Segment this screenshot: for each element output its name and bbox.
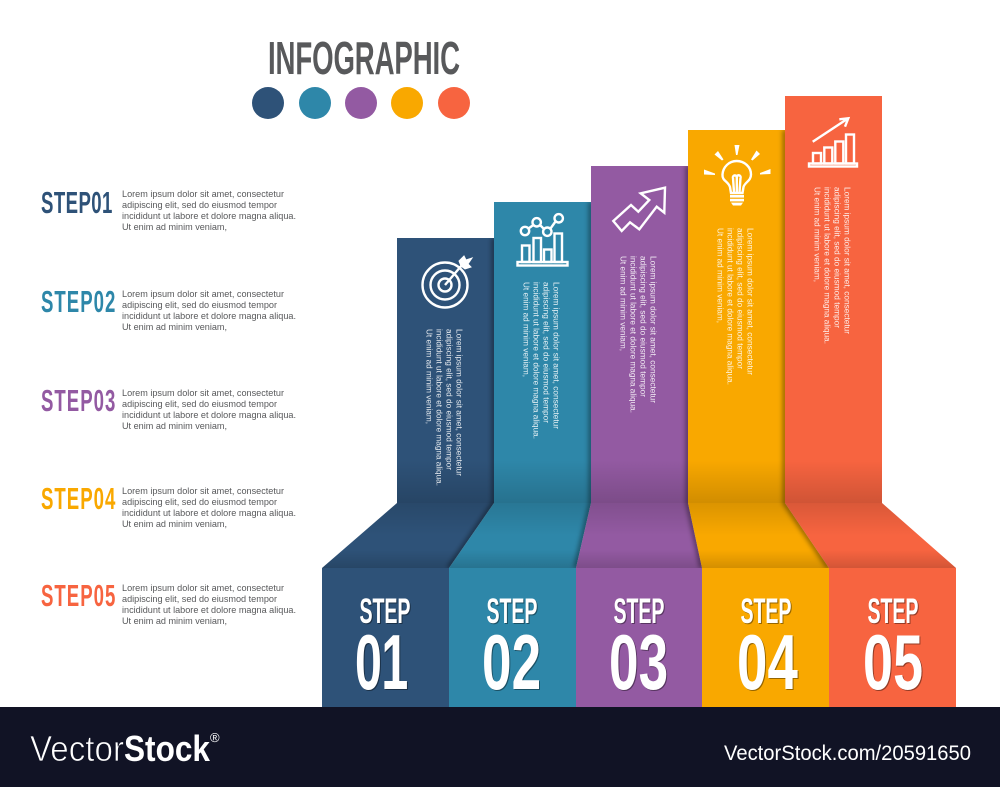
rotated paragraph: column 2: incididunt ut labore et dolore magna aliqua. xyxy=(532,282,542,439)
rotated paragraph: column 2: adipiscing elit, sed do eiusmod tempor xyxy=(542,282,552,423)
rotated paragraph: column 5 xyxy=(812,187,852,344)
rotated paragraph: column 5: Lorem ipsum dolor sit amet, consectetur xyxy=(842,187,852,334)
step label 02: 02 xyxy=(482,620,541,707)
step list item 2: Ut enim ad minim veniam, xyxy=(122,321,227,332)
staircase column: step 5 shape xyxy=(785,96,956,707)
rotated paragraph: column 3: Ut enim ad minim veniam, xyxy=(618,256,628,351)
rotated paragraph: column 4: incididunt ut labore et dolore magna aliqua. xyxy=(726,228,736,385)
step label 02: STEP xyxy=(486,592,537,632)
step label 03: 03 xyxy=(609,620,668,707)
step list item 5: STEP05 xyxy=(41,579,115,613)
rotated paragraph: column 1: Ut enim ad minim veniam, xyxy=(424,329,434,424)
step label 05: STEP xyxy=(868,592,918,632)
step list item 3: incididunt ut labore et dolore magna aliqua. xyxy=(122,409,296,420)
footer bar: Vector xyxy=(30,728,124,769)
rotated paragraph: column 2: Lorem ipsum dolor sit amet, consectetur xyxy=(552,282,562,429)
icon: rising zigzag arrow xyxy=(613,188,665,231)
step list item 4: Lorem ipsum dolor sit amet, consectetur xyxy=(122,485,284,496)
rotated paragraph: column 4 xyxy=(716,228,756,385)
rotated paragraph: column 2 xyxy=(522,282,562,439)
icon: target with arrow xyxy=(422,256,472,308)
step list item 3: Ut enim ad minim veniam, xyxy=(122,420,227,431)
icon: bar chart with arrow xyxy=(809,118,857,166)
rotated paragraph: column 4: Ut enim ad minim veniam, xyxy=(716,228,726,323)
title: INFOGRAPHIC xyxy=(268,34,460,85)
step list item 4: incididunt ut labore et dolore magna aliqua. xyxy=(122,507,296,518)
step list item 2: Lorem ipsum dolor sit amet, consectetur xyxy=(122,288,284,299)
fold shading xyxy=(322,130,956,568)
step list item 4: adipiscing elit, sed do eiusmod tempor xyxy=(122,496,277,507)
rotated paragraph: column 4: Lorem ipsum dolor sit amet, consectetur xyxy=(746,228,756,375)
staircase column: step 2 shape xyxy=(449,202,591,707)
footer bar: ® xyxy=(210,730,220,745)
rotated paragraph: column 2: Ut enim ad minim veniam, xyxy=(522,282,532,377)
step list item 5: Lorem ipsum dolor sit amet, consectetur xyxy=(122,582,284,593)
step label 03: STEP xyxy=(614,592,664,632)
footer bar: VectorStock.com/20591650 xyxy=(724,742,971,765)
staircase column: step 4 shape xyxy=(688,130,829,707)
rotated paragraph: column 5: incididunt ut labore et dolore magna aliqua. xyxy=(822,187,832,344)
colour dots row xyxy=(252,87,470,119)
rotated paragraph: column 5: adipiscing elit, sed do eiusmod tempor xyxy=(832,187,842,328)
footer bar xyxy=(0,707,1000,787)
staircase column: step 3 shape xyxy=(576,166,702,707)
step label 01: STEP xyxy=(360,592,410,632)
rotated paragraph: column 3: adipiscing elit, sed do eiusmod tempor xyxy=(638,256,648,397)
rotated paragraph: column 4: adipiscing elit, sed do eiusmod tempor xyxy=(736,228,746,369)
step list item 3: Lorem ipsum dolor sit amet, consectetur xyxy=(122,387,284,398)
step list item 2 xyxy=(41,285,296,332)
step list item 5: Ut enim ad minim veniam, xyxy=(122,615,227,626)
icon: light bulb xyxy=(704,145,770,206)
step label 04: STEP xyxy=(740,592,791,632)
footer bar: Stock xyxy=(124,728,211,769)
step list item 4: Ut enim ad minim veniam, xyxy=(122,518,227,529)
step list item 4 xyxy=(41,482,296,529)
step list item 3: STEP03 xyxy=(41,384,115,418)
step list item 5 xyxy=(41,579,296,626)
step list item 2: STEP02 xyxy=(41,285,115,319)
rotated paragraph: column 5: Ut enim ad minim veniam, xyxy=(812,187,822,282)
step list item 1: Ut enim ad minim veniam, xyxy=(122,221,227,232)
step list item 4: STEP04 xyxy=(41,482,116,516)
rotated paragraph: column 1 xyxy=(424,329,464,486)
icon: chart with nodes xyxy=(518,214,568,266)
step label 05: 05 xyxy=(863,619,923,706)
rotated paragraph: column 3: Lorem ipsum dolor sit amet, consectetur xyxy=(648,256,658,403)
rotated paragraph: column 3: incididunt ut labore et dolore magna aliqua. xyxy=(628,256,638,413)
step list item 1 xyxy=(41,186,296,232)
step label 04: 04 xyxy=(737,619,798,706)
step list item 5: adipiscing elit, sed do eiusmod tempor xyxy=(122,593,277,604)
step label 01: 01 xyxy=(355,618,408,706)
step list item 2: adipiscing elit, sed do eiusmod tempor xyxy=(122,299,277,310)
step list item 3 xyxy=(41,384,296,431)
rotated paragraph: column 1: incididunt ut labore et dolore magna aliqua. xyxy=(434,329,444,486)
step list item 1: incididunt ut labore et dolore magna aliqua. xyxy=(122,210,296,221)
step list item 2: incididunt ut labore et dolore magna aliqua. xyxy=(122,310,296,321)
step list item 3: adipiscing elit, sed do eiusmod tempor xyxy=(122,398,277,409)
staircase column: step 1 shape xyxy=(322,238,494,707)
rotated paragraph: column 1: Lorem ipsum dolor sit amet, consectetur xyxy=(454,329,464,476)
step list item 1: adipiscing elit, sed do eiusmod tempor xyxy=(122,199,277,210)
step list item 1: Lorem ipsum dolor sit amet, consectetur xyxy=(122,188,284,199)
rotated paragraph: column 1: adipiscing elit, sed do eiusmod tempor xyxy=(444,329,454,470)
rotated paragraph: column 3 xyxy=(618,256,658,413)
step list item 5: incididunt ut labore et dolore magna aliqua. xyxy=(122,604,296,615)
step list item 1: STEP01 xyxy=(41,186,112,220)
